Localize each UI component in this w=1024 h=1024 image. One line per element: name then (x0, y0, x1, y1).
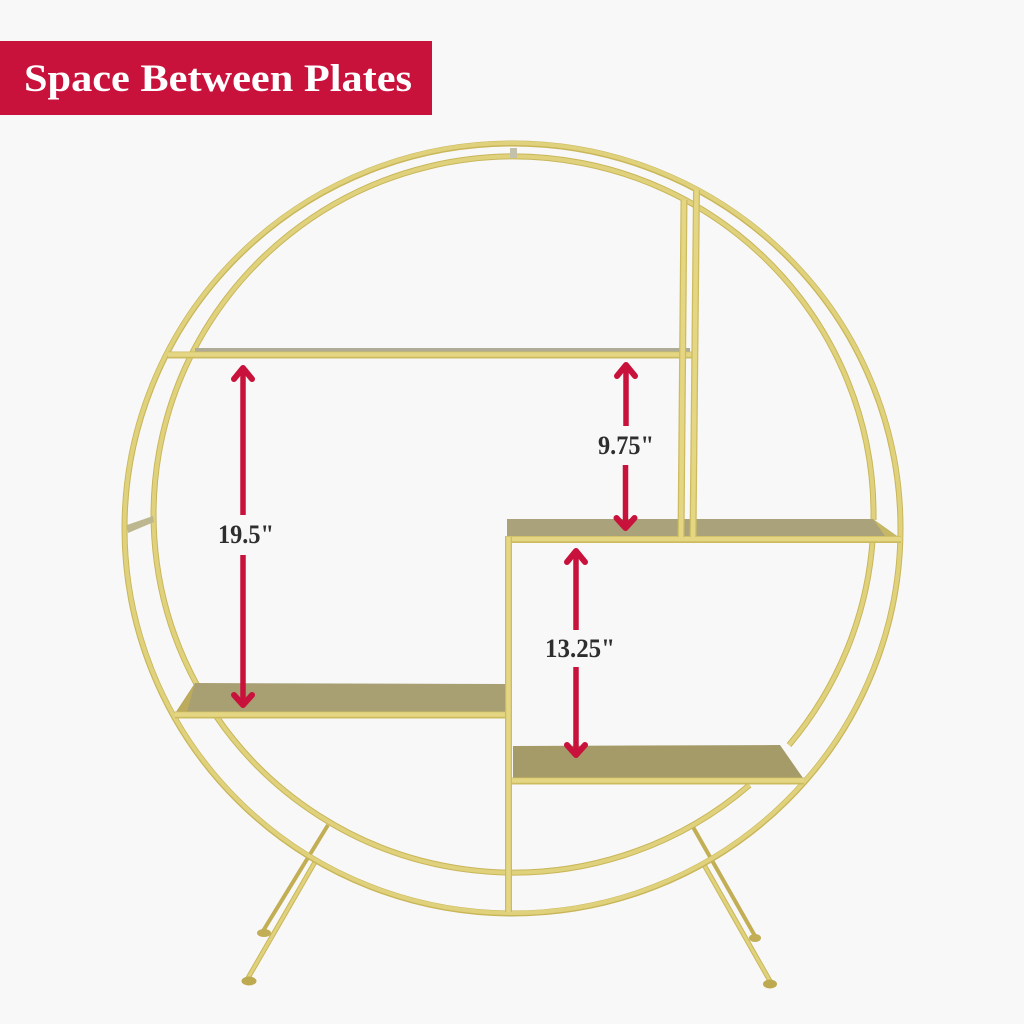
dimension 19.5 inches: 19.5" (218, 519, 274, 549)
dimension 13.25 inches: 13.25" (545, 633, 615, 663)
back legs (257, 825, 761, 942)
lower left shelf (175, 683, 508, 715)
top shelf (168, 348, 692, 355)
title banner: Space Between Plates (24, 57, 412, 100)
ring spacers (127, 148, 517, 533)
dimension 9.75 inches: 9.75" (598, 430, 654, 460)
dimension 9.75 inches (598, 365, 654, 528)
middle right shelf (505, 519, 901, 540)
dimension 19.5 inches (218, 368, 274, 705)
outer ring (124, 143, 900, 914)
vertical posts (508, 190, 696, 912)
title banner (0, 41, 432, 115)
front legs (242, 862, 777, 988)
dimension 13.25 inches (545, 551, 615, 755)
inner ring (154, 156, 874, 873)
shelf unit (124, 143, 901, 988)
lower right shelf (510, 745, 804, 781)
